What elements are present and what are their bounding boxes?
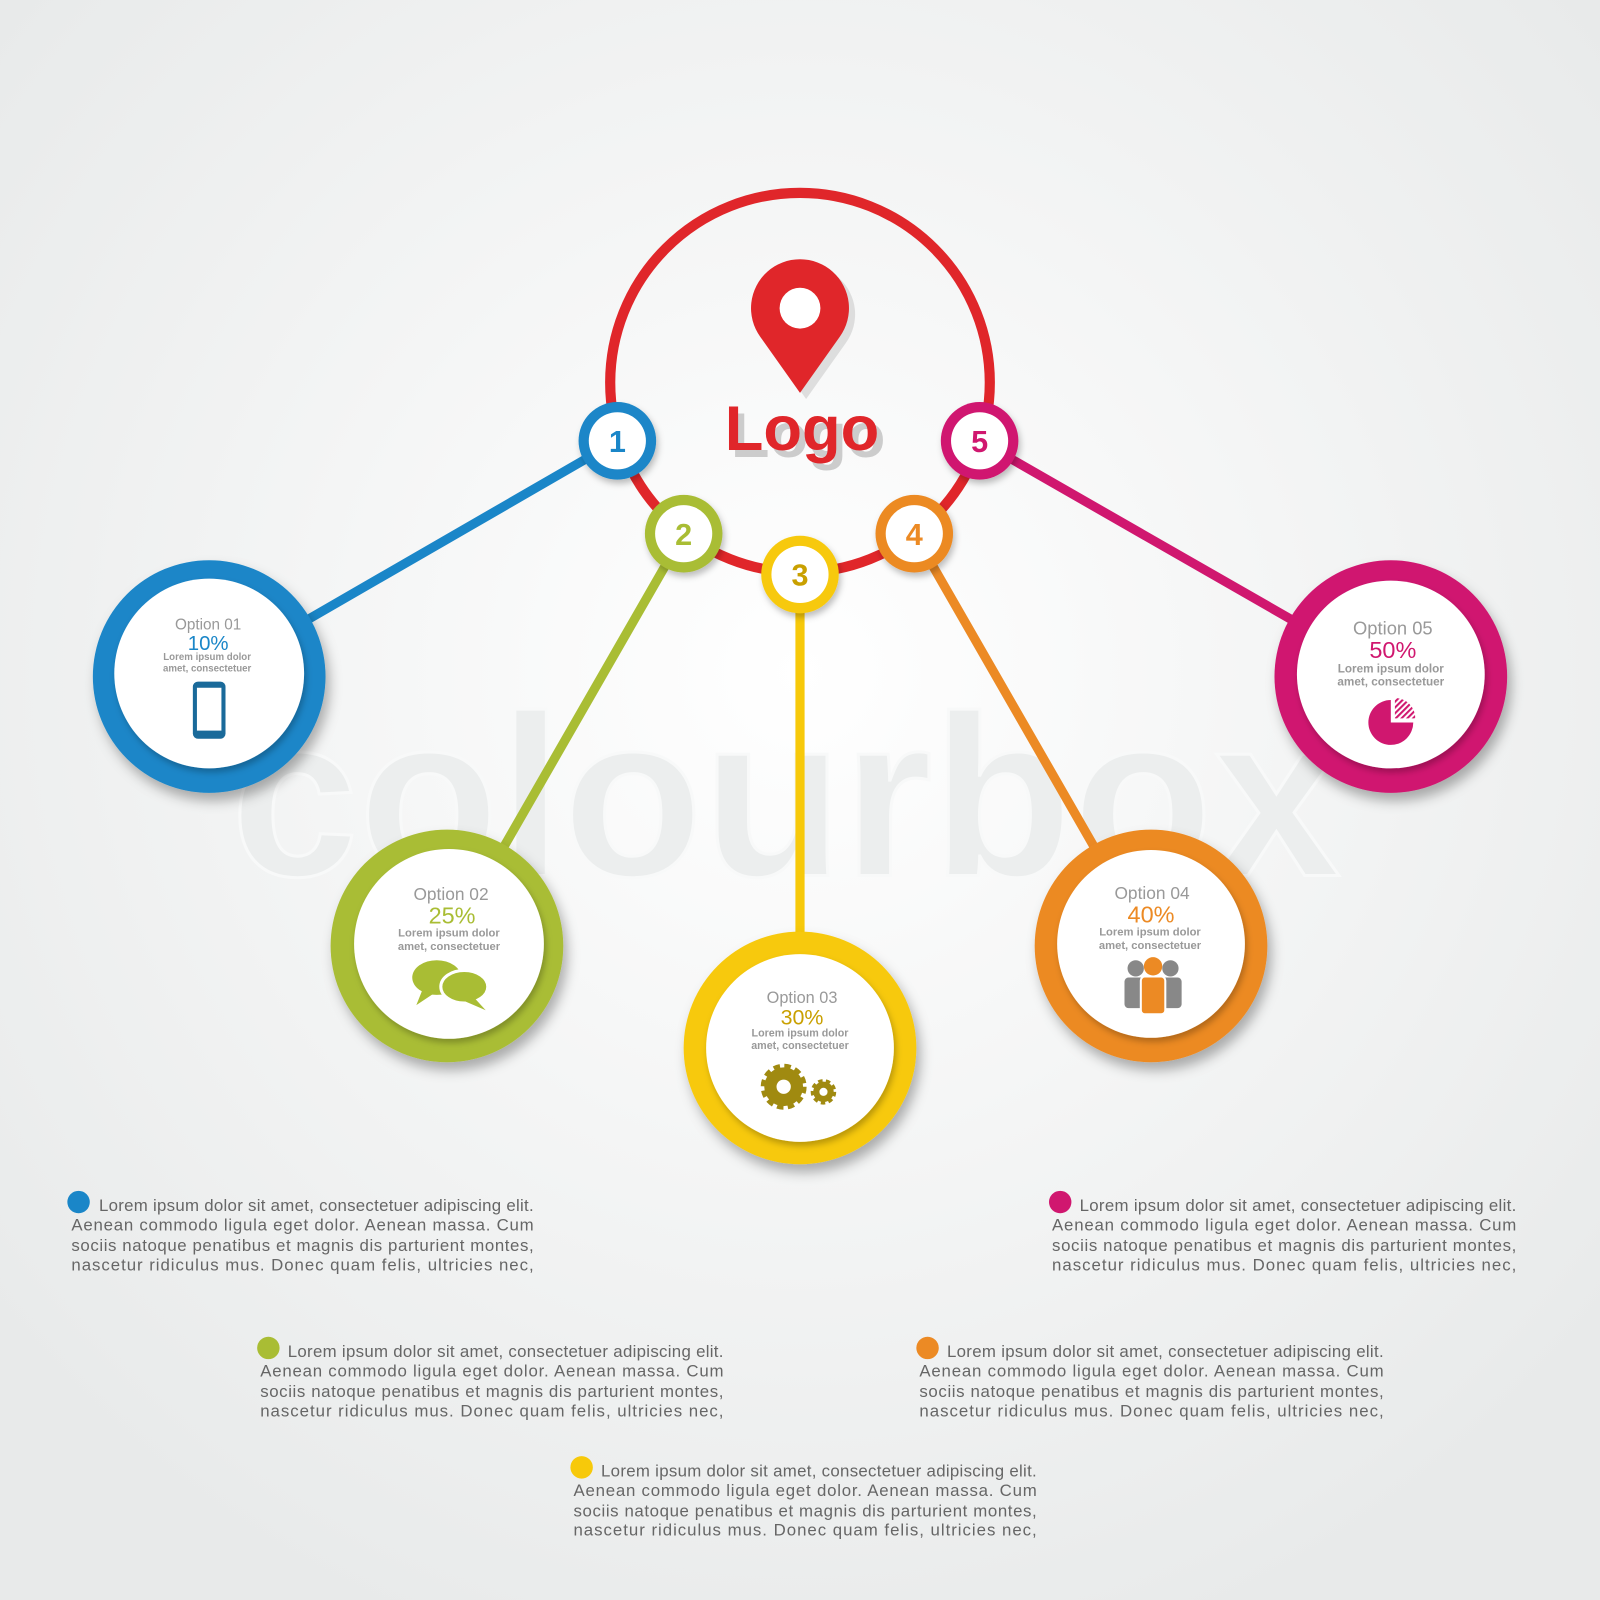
- text block 1: Lorem ipsum dolor sit amet, consectetuer adipiscing elit.: [99, 1196, 534, 1215]
- text block 5: Aenean commodo ligula eget dolor. Aenean massa. Cum: [1052, 1216, 1516, 1235]
- icon: gears: [764, 1067, 834, 1106]
- text block 2: nascetur ridiculus mus. Donec quam felis, ultricies nec,: [260, 1401, 723, 1420]
- circle texts: 10%: [188, 633, 229, 655]
- icon: location pin: [751, 259, 855, 399]
- text block 5: Lorem ipsum dolor sit amet, consectetuer adipiscing elit.: [1080, 1196, 1516, 1215]
- central ring: [610, 193, 990, 572]
- text block 5: nascetur ridiculus mus. Donec quam felis, ultricies nec,: [1052, 1255, 1516, 1274]
- text block 2: [257, 1337, 723, 1420]
- logo text: Logo: [725, 394, 879, 464]
- number badges: 5: [971, 425, 988, 459]
- text block 1: Aenean commodo ligula eget dolor. Aenean massa. Cum: [71, 1216, 534, 1235]
- connectors: [209, 441, 1391, 1048]
- circle texts: Lorem ipsum dolor: [752, 1028, 848, 1040]
- circle texts: amet, consectetuer: [751, 1040, 849, 1052]
- number badges: 2: [675, 518, 692, 552]
- circle texts: amet, consectetuer: [398, 941, 501, 953]
- option circles: [93, 560, 1507, 1164]
- circle texts: Lorem ipsum dolor: [398, 928, 500, 940]
- text block 5: [1049, 1191, 1516, 1274]
- circle texts: amet, consectetuer: [1099, 940, 1202, 952]
- text block 3: nascetur ridiculus mus. Donec quam felis, ultricies nec,: [573, 1521, 1037, 1540]
- circle texts: Option 05: [1353, 618, 1433, 639]
- text block 2: Aenean commodo ligula eget dolor. Aenean massa. Cum: [260, 1362, 723, 1381]
- text block 4: sociis natoque penatibus et magnis dis parturient montes,: [919, 1382, 1384, 1401]
- number badges: 3: [791, 559, 809, 593]
- circle texts: [163, 617, 1445, 1052]
- logo text: Logo: [731, 401, 885, 471]
- text block 3: Aenean commodo ligula eget dolor. Aenean massa. Cum: [573, 1481, 1037, 1500]
- text blocks: [67, 1191, 1516, 1540]
- text block 3: [570, 1456, 1037, 1540]
- text block 2: sociis natoque penatibus et magnis dis parturient montes,: [260, 1382, 723, 1401]
- circle texts: Lorem ipsum dolor: [1338, 662, 1444, 675]
- circle texts: Option 04: [1114, 883, 1190, 903]
- circle texts: 50%: [1369, 637, 1416, 663]
- text block 4: Lorem ipsum dolor sit amet, consectetuer adipiscing elit.: [947, 1342, 1384, 1361]
- text block 1: [67, 1191, 534, 1274]
- circle texts: 25%: [429, 902, 476, 928]
- text block 4: nascetur ridiculus mus. Donec quam felis, ultricies nec,: [919, 1401, 1384, 1420]
- text block 1: nascetur ridiculus mus. Donec quam felis, ultricies nec,: [71, 1255, 534, 1274]
- circle texts: amet, consectetuer: [1337, 676, 1445, 689]
- text block 3: Lorem ipsum dolor sit amet, consectetuer adipiscing elit.: [601, 1462, 1037, 1481]
- circle texts: amet, consectetuer: [163, 663, 252, 674]
- circle texts: Option 02: [413, 884, 489, 904]
- circle texts: Option 03: [767, 989, 837, 1007]
- number badges: 1: [609, 425, 626, 459]
- icon: phone: [193, 682, 226, 739]
- icon: pie chart: [1368, 698, 1415, 745]
- circle texts: Lorem ipsum dolor: [163, 652, 251, 663]
- text block 2: Lorem ipsum dolor sit amet, consectetuer adipiscing elit.: [288, 1342, 723, 1361]
- text block 3: sociis natoque penatibus et magnis dis parturient montes,: [573, 1501, 1037, 1520]
- watermark: colourbox: [231, 668, 1341, 925]
- number badges: [579, 402, 1018, 613]
- circle texts: Lorem ipsum dolor: [1099, 927, 1201, 939]
- circle texts: 30%: [781, 1005, 823, 1029]
- circle texts: Option 01: [175, 617, 241, 634]
- text block 4: Aenean commodo ligula eget dolor. Aenean massa. Cum: [919, 1362, 1384, 1381]
- icon: people: [1124, 957, 1182, 1014]
- text block 4: [916, 1337, 1384, 1420]
- text block 5: sociis natoque penatibus et magnis dis parturient montes,: [1052, 1236, 1516, 1255]
- icon: speech bubbles: [412, 960, 488, 1010]
- number badges: 4: [906, 518, 923, 552]
- text block 1: sociis natoque penatibus et magnis dis parturient montes,: [71, 1236, 534, 1255]
- circle texts: 40%: [1128, 901, 1175, 927]
